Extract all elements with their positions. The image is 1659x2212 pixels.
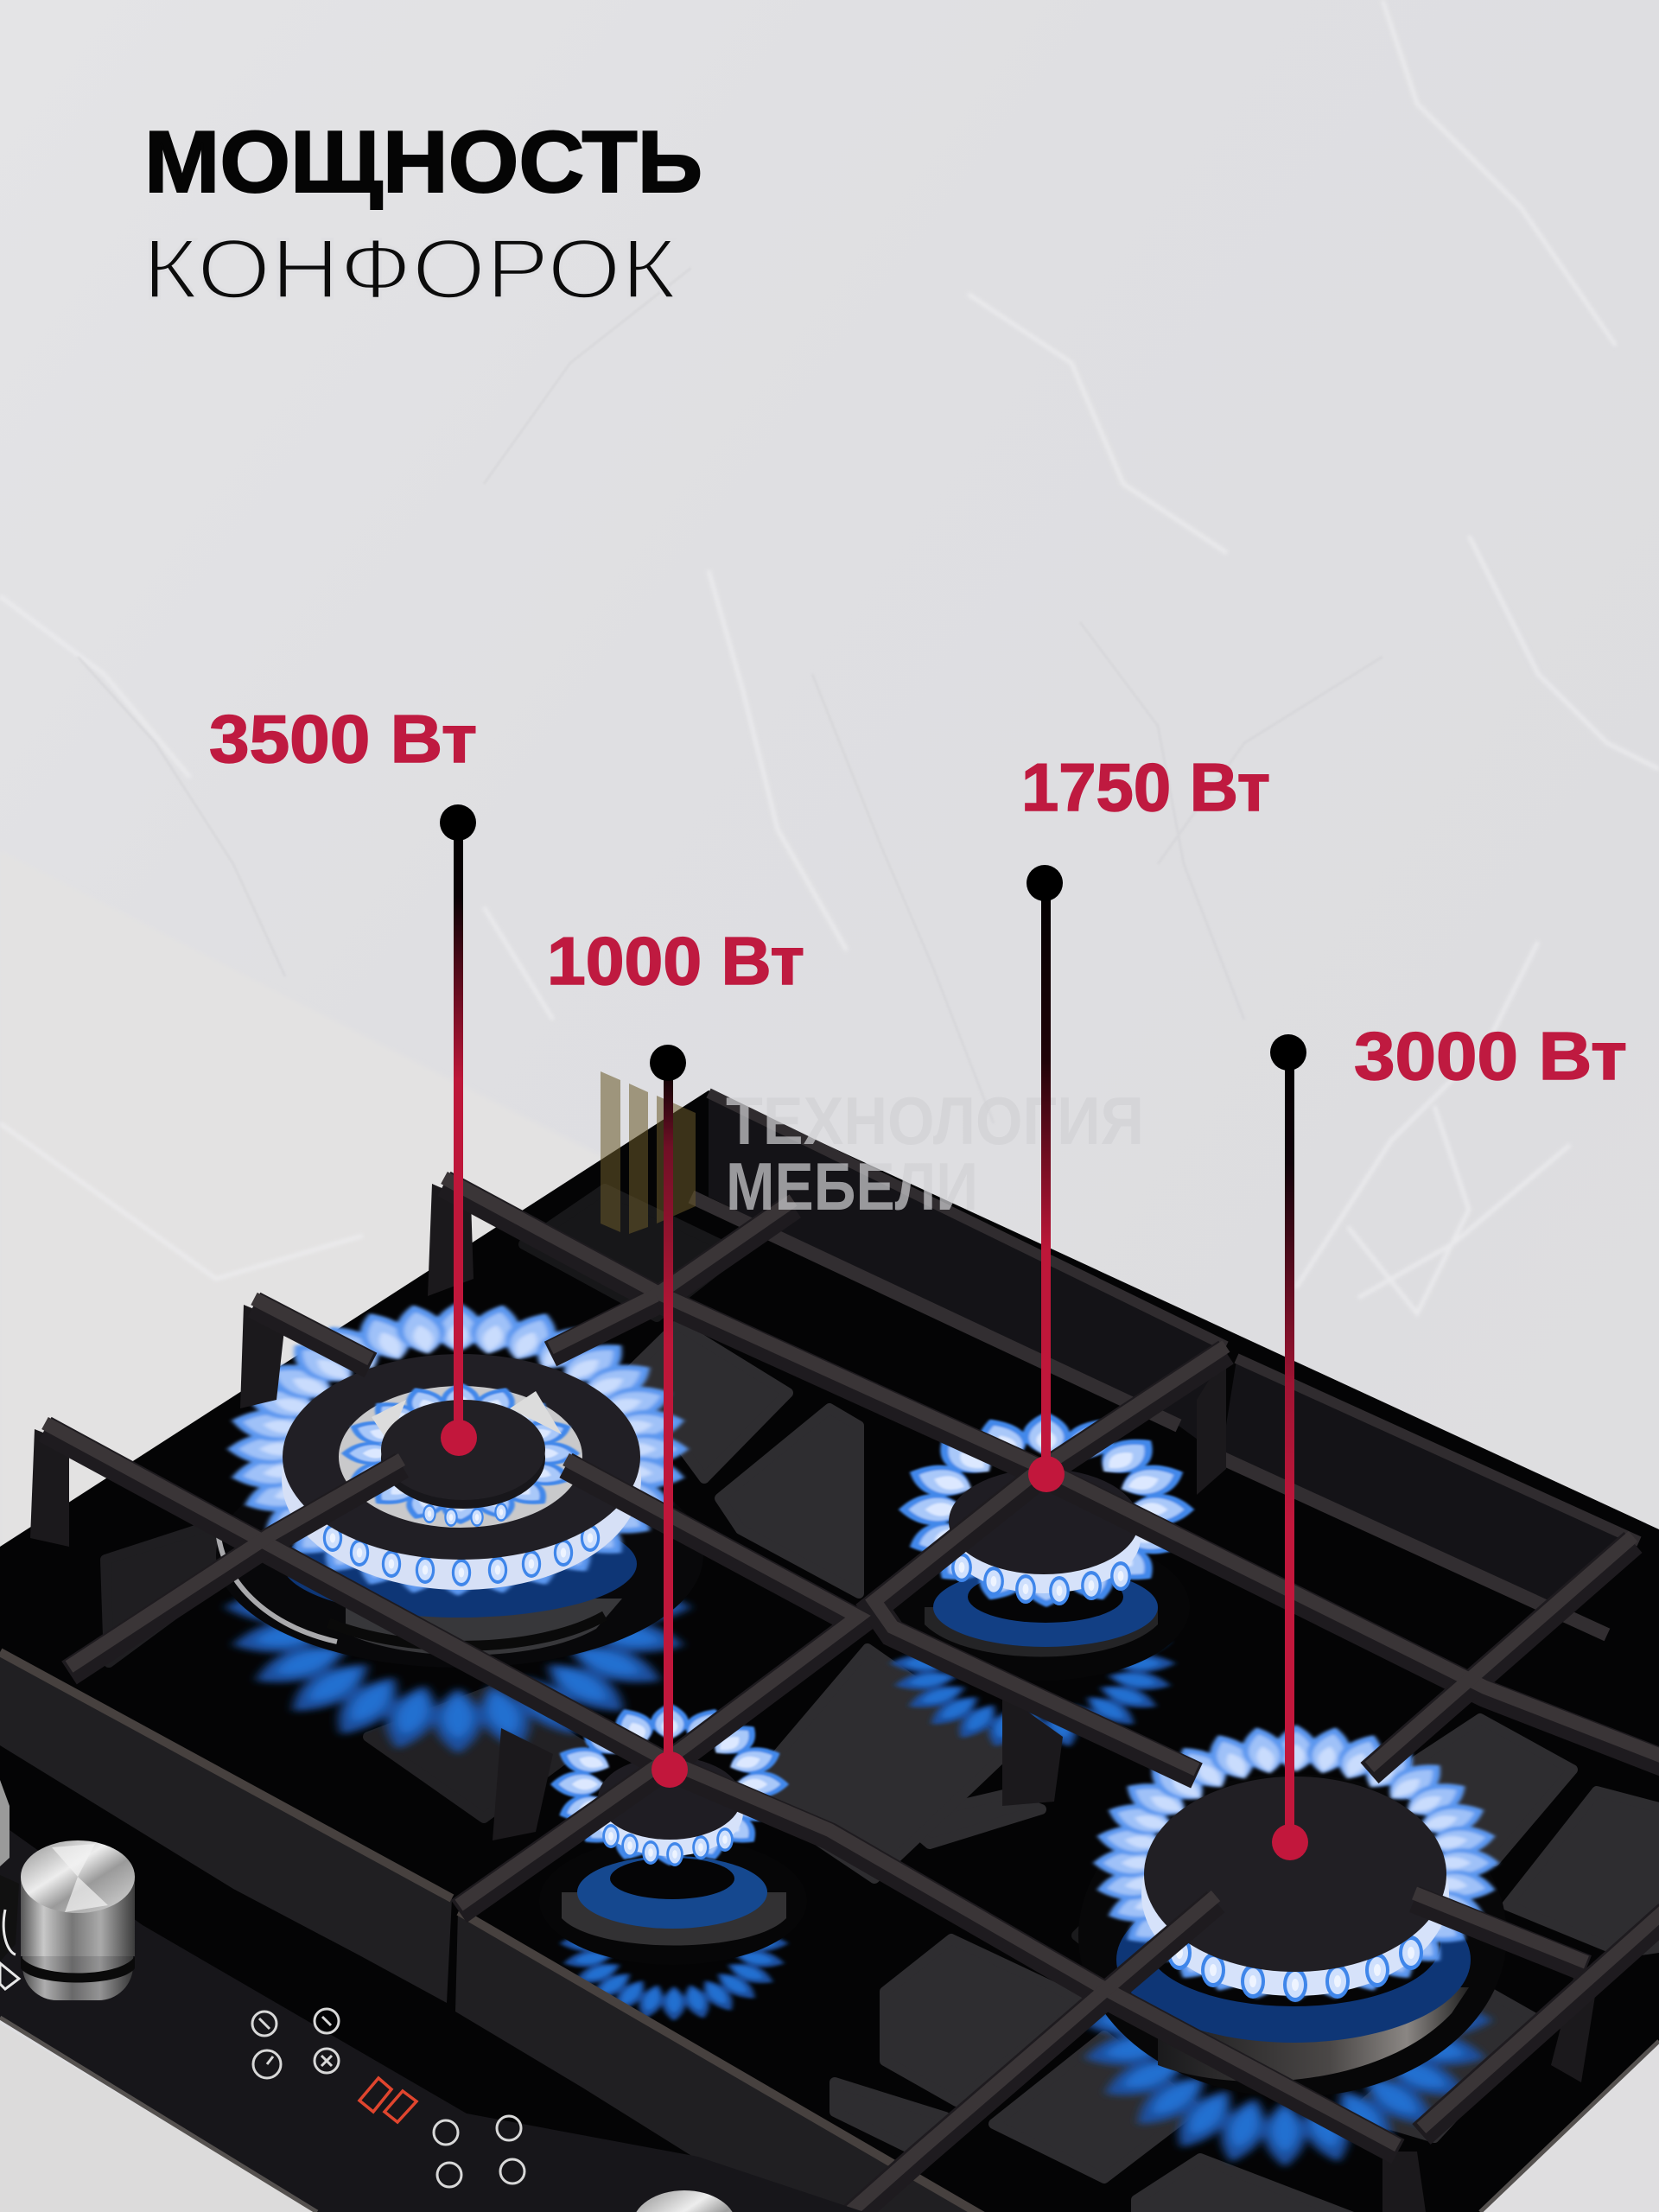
callout: 3000 W: [1270, 1018, 1627, 1860]
burner: 3500 W wok burner: [190, 1278, 726, 1772]
watermark text: [726, 1083, 1144, 1224]
watermark text: ТЕХНОЛОГИЯ: [726, 1083, 1144, 1159]
left front grate panel: [0, 1652, 452, 2003]
right front grate panel: [455, 1911, 985, 2212]
callout: 3500 W: [209, 701, 477, 1456]
hob: black glass body: [0, 1090, 1659, 2212]
rear grate board left: [691, 1093, 1226, 1460]
grate legs: [30, 1184, 1599, 2212]
touch buttons: [252, 2009, 524, 2187]
burner: 1000 W burner: [539, 1696, 807, 2031]
title: МОЩНОСТЬ: [144, 114, 702, 211]
control knob: [0, 1840, 135, 2000]
callout: 3000 W: 3000 Вт: [1354, 1018, 1627, 1094]
hob: glass panes: [105, 1189, 1659, 2212]
countertop corner left: [0, 2018, 317, 2212]
cast-iron grate bars: [45, 1178, 1659, 2212]
watermark logo icon: [601, 1071, 696, 1234]
callout: 1750 W: 1750 Вт: [1021, 749, 1270, 825]
rear grate board right: [1221, 1358, 1639, 1635]
callout: 1750 W: [1021, 749, 1270, 1492]
title: [143, 114, 702, 316]
burner: 1750 W burner: [873, 1404, 1206, 1760]
callout: 3500 W: 3500 Вт: [209, 701, 477, 777]
control knob, bottom: [632, 2190, 736, 2212]
digital display: [359, 2078, 416, 2122]
callout: 1000 W: [547, 923, 804, 1788]
callout: 1000 W: 1000 Вт: [547, 923, 804, 999]
title: КОНФОРОК: [143, 221, 677, 316]
countertop corner right: [1480, 2041, 1659, 2212]
control panel glass: [0, 1823, 864, 2212]
burner: 3000 W burner: [1052, 1702, 1532, 2185]
watermark text: МЕБЕЛИ: [726, 1148, 978, 1224]
control knob, partial far left: [0, 1780, 19, 1961]
